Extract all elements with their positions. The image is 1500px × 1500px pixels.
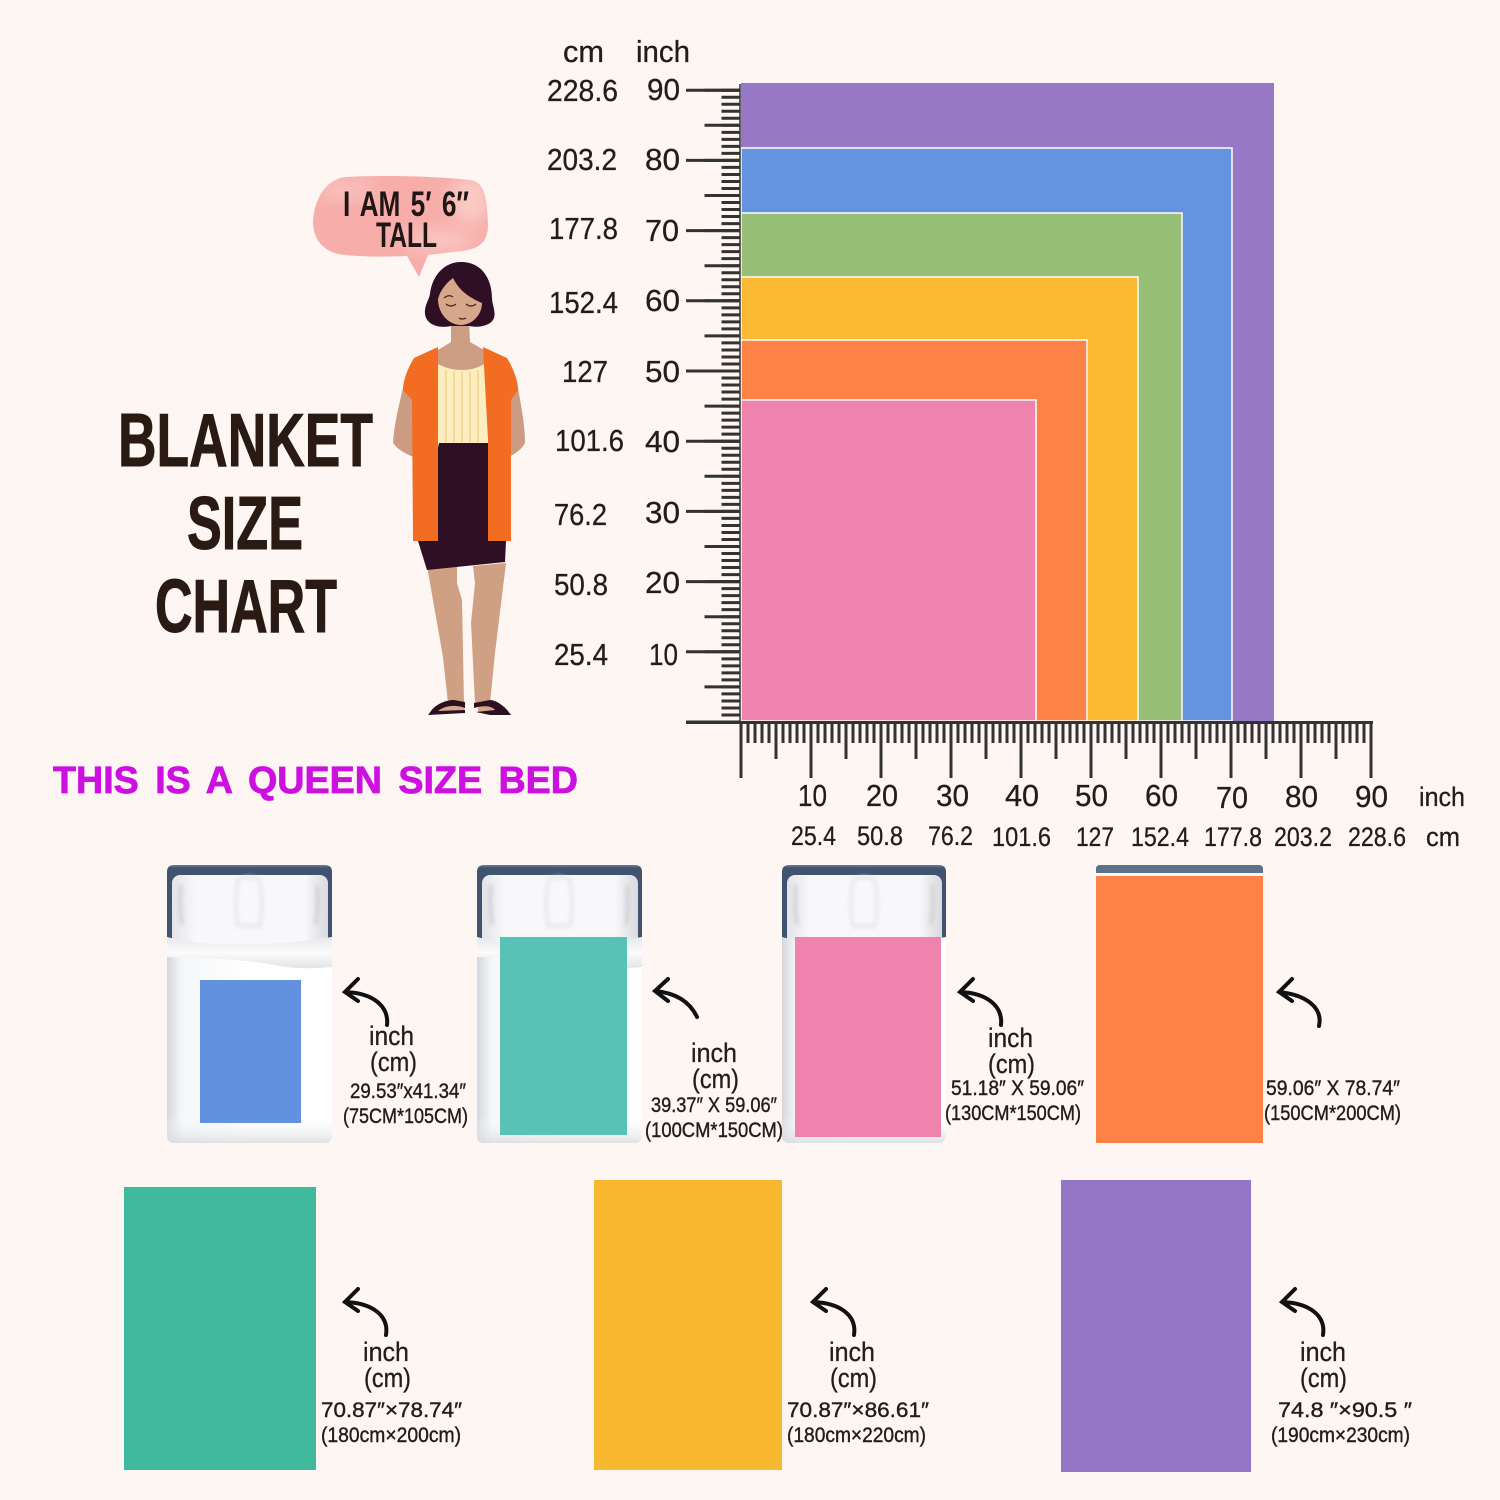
y axis labels: 101.6 — [555, 423, 624, 458]
y axis labels: 90 — [647, 72, 680, 107]
size label — [787, 1337, 930, 1447]
arrow — [813, 1289, 854, 1335]
y axis labels: 60 — [645, 283, 680, 318]
arrow — [655, 979, 697, 1017]
x axis labels: inch — [1419, 782, 1465, 812]
title: BLANKET — [118, 398, 373, 482]
callout: height speech bubble: TALL — [376, 216, 437, 255]
x axis labels: 152.4 — [1131, 822, 1189, 852]
blanket — [500, 937, 627, 1135]
x axis labels: cm — [1426, 822, 1460, 852]
blanket — [124, 1187, 316, 1470]
x axis labels: 90 — [1355, 779, 1388, 814]
size label: (150CM*200CM) — [1264, 1102, 1401, 1125]
size label: 70.87″×78.74″ — [321, 1399, 463, 1422]
y axis labels: 30 — [645, 495, 680, 530]
size label: (cm) — [1300, 1363, 1347, 1393]
size label: 51.18″ X 59.06″ — [951, 1077, 1085, 1100]
size label: 29.53″x41.34″ — [350, 1080, 466, 1103]
x axis labels: 20 — [866, 778, 898, 813]
x axis labels: 228.6 — [1348, 822, 1406, 852]
blanket — [795, 937, 941, 1137]
x axis labels: 76.2 — [928, 821, 973, 851]
size label — [945, 1023, 1085, 1125]
y axis labels: 10 — [649, 637, 678, 672]
y axis labels: 20 — [645, 565, 680, 600]
title: SIZE — [187, 481, 303, 565]
skirt — [418, 443, 506, 570]
size label — [1264, 1077, 1401, 1125]
striped top — [438, 364, 488, 443]
x axis labels: 80 — [1285, 779, 1318, 814]
arrow — [345, 1289, 386, 1335]
y axis labels: 40 — [645, 424, 680, 459]
hair — [425, 262, 495, 327]
size label: (cm) — [830, 1363, 877, 1393]
y axis labels: cm — [563, 34, 604, 69]
size label: (180cm×200cm) — [321, 1424, 461, 1447]
bed — [477, 865, 642, 1143]
x axis labels: 127 — [1076, 822, 1114, 852]
blanket — [1061, 1180, 1251, 1472]
x axis labels — [791, 778, 1465, 852]
y axis labels: 25.4 — [554, 637, 608, 672]
x axis labels: 25.4 — [791, 821, 836, 851]
facial features — [444, 296, 476, 319]
callout: height speech bubble: I AM 5′ 6″ — [343, 185, 469, 224]
y axis labels: 127 — [562, 354, 608, 389]
size label: (cm) — [988, 1049, 1035, 1079]
chart: nested blanket sizes — [741, 83, 1274, 722]
y axis labels: 152.4 — [549, 285, 618, 320]
size label — [1271, 1337, 1413, 1447]
size label: inch — [1300, 1337, 1346, 1367]
size label: inch — [988, 1023, 1033, 1053]
title: CHART — [155, 564, 337, 648]
arrow — [1279, 979, 1320, 1026]
x axis labels: 10 — [798, 778, 827, 813]
headboard — [1096, 865, 1263, 873]
x axis labels: 30 — [936, 778, 969, 813]
x axis labels: 101.6 — [992, 822, 1051, 852]
x axis labels: 70 — [1216, 780, 1248, 815]
title — [118, 398, 373, 648]
illustration: woman — [393, 262, 525, 715]
callout: height speech bubble — [313, 176, 490, 277]
y axis labels: 70 — [645, 213, 679, 248]
blue blanket — [741, 148, 1232, 721]
arrow — [1282, 1289, 1323, 1335]
y axis labels: 50 — [645, 354, 680, 389]
x axis labels: 40 — [1005, 778, 1039, 813]
size label — [343, 1021, 468, 1128]
size label — [321, 1337, 463, 1447]
panel: 150 x 200 cm on bed — [1096, 865, 1401, 1143]
y axis labels — [547, 34, 690, 672]
arrow — [345, 979, 387, 1025]
orange cardigan — [403, 347, 518, 541]
x axis labels: 60 — [1145, 778, 1178, 813]
size label: (180cm×220cm) — [787, 1424, 926, 1447]
x axis labels: 203.2 — [1274, 822, 1332, 852]
size label: (cm) — [692, 1064, 739, 1094]
x axis ruler — [686, 722, 1373, 750]
size label: inch — [691, 1038, 737, 1068]
size label: 59.06″ X 78.74″ — [1266, 1077, 1401, 1100]
panel: 130 x 150 cm on bed — [782, 865, 1085, 1143]
blanket — [1096, 876, 1263, 1143]
legs — [427, 563, 506, 703]
y axis labels: 177.8 — [549, 211, 618, 246]
bed — [782, 865, 946, 1143]
size label: (75CM*105CM) — [343, 1105, 468, 1128]
arms — [393, 388, 525, 457]
yellow blanket — [741, 277, 1138, 721]
size label: inch — [363, 1337, 409, 1367]
blanket — [200, 980, 301, 1123]
x axis labels: 177.8 — [1204, 822, 1262, 852]
blanket — [594, 1180, 782, 1470]
y axis labels: 203.2 — [547, 142, 617, 177]
y axis labels: 80 — [645, 142, 680, 177]
size label: (cm) — [370, 1047, 417, 1077]
green blanket — [741, 213, 1182, 721]
heading: queen size bed: THIS IS A QUEEN SIZE BED — [53, 760, 578, 802]
size label: (100CM*150CM) — [645, 1119, 783, 1142]
size label: (130CM*150CM) — [945, 1102, 1081, 1125]
y axis ruler — [713, 84, 740, 724]
panel: 180 x 200 cm — [124, 1187, 463, 1470]
size label: 70.87″×86.61″ — [787, 1399, 930, 1422]
bed — [167, 865, 332, 1143]
x axis labels: 50 — [1075, 778, 1108, 813]
orange blanket — [741, 340, 1087, 721]
panel: 190 x 230 cm — [1061, 1180, 1413, 1472]
size label: 74.8 ″×90.5 ″ — [1278, 1399, 1413, 1422]
sandals — [428, 700, 511, 715]
arrow — [960, 979, 1001, 1025]
panel: 180 x 220 cm — [594, 1180, 930, 1470]
x axis labels: 50.8 — [857, 821, 903, 851]
panel: 100 x 150 cm on bed — [477, 865, 783, 1143]
pink blanket — [741, 400, 1036, 721]
purple blanket — [741, 83, 1274, 722]
size label: inch — [369, 1021, 414, 1051]
size label: (190cm×230cm) — [1271, 1424, 1410, 1447]
neck and chest — [438, 318, 484, 370]
y axis labels: 228.6 — [547, 73, 618, 108]
y axis labels: 76.2 — [554, 497, 607, 532]
face — [438, 278, 482, 325]
size label: (cm) — [364, 1363, 411, 1393]
size label — [645, 1038, 783, 1142]
panel: 75 x 105 cm on bed — [167, 865, 468, 1143]
y axis labels: inch — [636, 34, 690, 69]
size label: inch — [829, 1337, 875, 1367]
size label: 39.37″ X 59.06″ — [651, 1094, 777, 1117]
y axis labels: 50.8 — [554, 567, 608, 602]
